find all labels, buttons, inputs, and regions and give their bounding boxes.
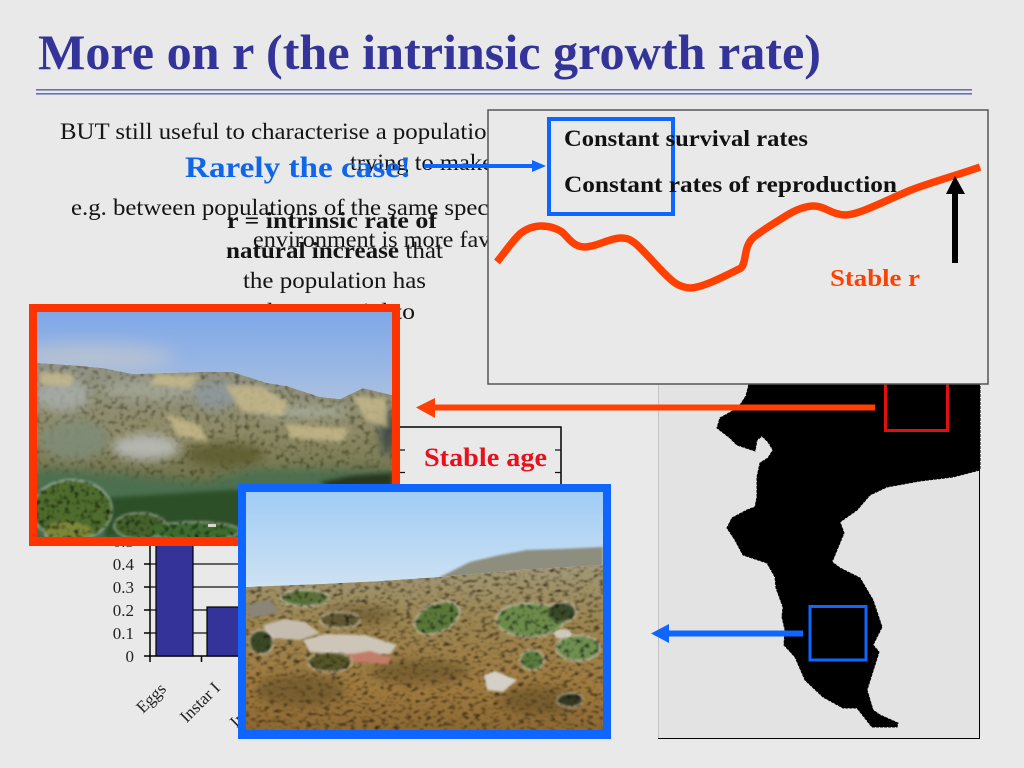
trees: [32, 480, 240, 543]
constant rates text: [564, 126, 897, 197]
title: More on r (the intrinsic growth rate): [38, 24, 821, 80]
definition of r: the potential to: [260, 299, 415, 324]
darker scrub patches: [255, 606, 580, 714]
label: stable r: Stable r: [830, 266, 920, 292]
mountain mass: [37, 363, 392, 537]
definition of r: the population has: [243, 268, 426, 293]
scrubland: [246, 565, 603, 730]
arrow: rarely the case to box: [424, 160, 546, 172]
bars: [156, 430, 245, 656]
definition of r: [226, 208, 444, 324]
study box: fynbos: [810, 606, 866, 660]
x axis labels: Instar II: [226, 679, 278, 731]
photo: fynbos with blue frame: [238, 484, 611, 739]
callout: rarely the case: Rarely the case!: [185, 151, 411, 184]
definition of r: r = intrinsic rate of: [227, 208, 437, 233]
body text behind overlays: [60, 119, 563, 252]
distant hill: [438, 547, 603, 578]
line: population trajectory: [497, 167, 980, 288]
arrow: map to fynbos photo: [651, 624, 803, 643]
shrubs: [249, 590, 600, 707]
x axis labels: Instar I: [176, 678, 224, 726]
label: stable age: [405, 437, 555, 481]
photo: mountain with red frame: [5, 304, 400, 546]
body text behind overlays: environment is more favourable: [253, 227, 563, 252]
arrow: map to mountain photo: [416, 398, 875, 418]
green slope: [37, 468, 392, 537]
body text behind overlays: BUT still useful to characterise a population: [60, 119, 500, 144]
haze and shadows: [34, 379, 396, 467]
definition of r: natural increase that: [226, 238, 444, 263]
y axis labels: 0.4: [113, 555, 134, 574]
constant rates text: Constant survival rates: [564, 126, 808, 151]
y axis labels: 0.2: [113, 601, 134, 620]
low cloud: [112, 434, 180, 460]
blue highlight box: [549, 119, 673, 214]
title underline: [36, 89, 972, 95]
map of southern cape: [658, 370, 980, 738]
y axis labels: 0.3: [113, 578, 134, 597]
body text behind overlays: trying to make: [350, 150, 493, 175]
y axis labels: 0.5: [113, 532, 134, 551]
bar chart: stable age distribution: [113, 427, 561, 731]
y axis labels: 0.1: [113, 624, 134, 643]
rocks: [246, 600, 572, 692]
landmass: [717, 380, 980, 727]
cliff highlights: [40, 372, 388, 442]
study box: mountain: [886, 370, 948, 430]
x axis labels: [132, 678, 278, 731]
label: stable age: Stable age: [424, 443, 547, 472]
y axis labels: [113, 532, 134, 666]
constant rates text: Constant rates of reproduction: [564, 172, 897, 197]
x axis labels: Eggs: [132, 679, 170, 717]
y axis labels: 0: [126, 647, 134, 666]
arrow: black pointer to stable r: [946, 176, 965, 263]
panel: stable r graph: [488, 110, 988, 384]
body text behind overlays: e.g. between populations of the same species: [71, 195, 516, 220]
